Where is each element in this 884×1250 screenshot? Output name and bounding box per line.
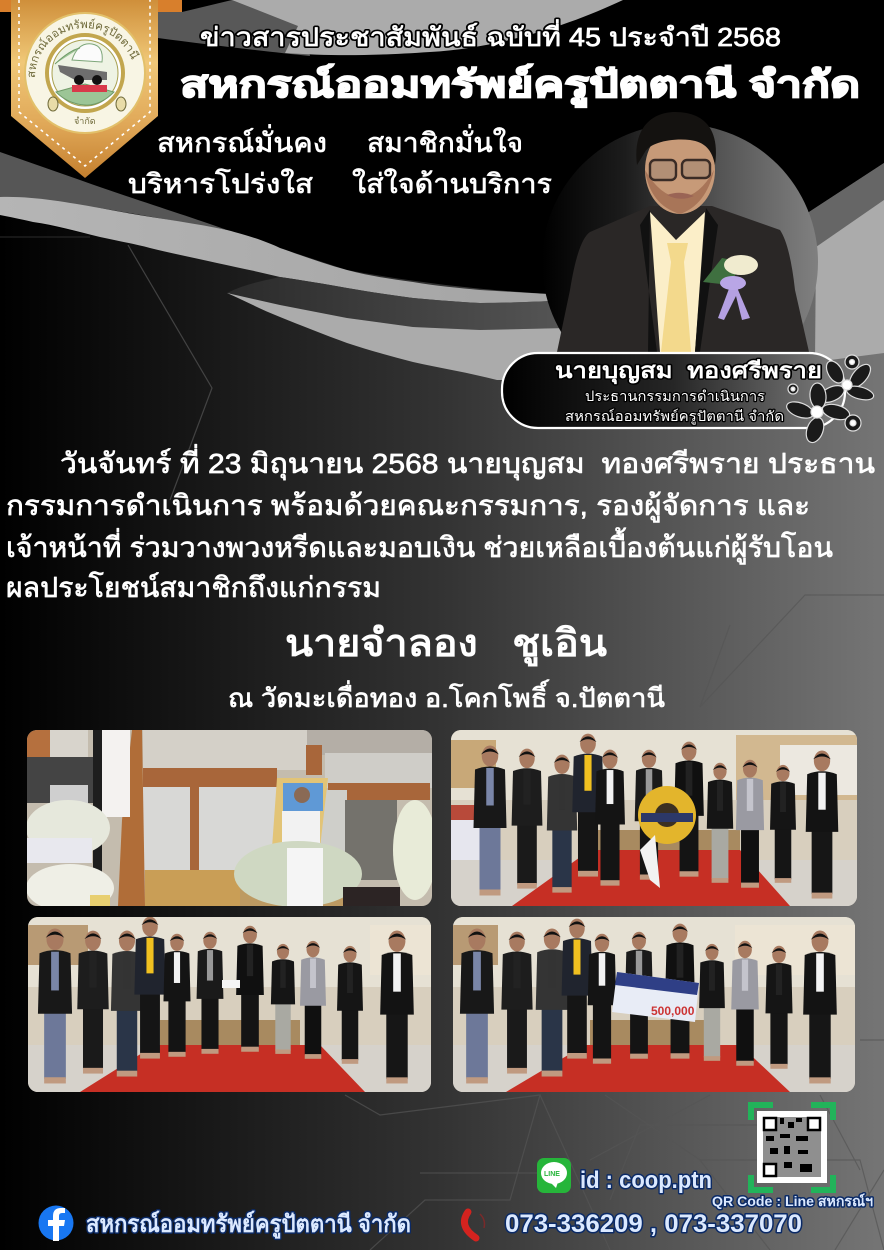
- name plate: นายบุญสม ทองศรีพราย: [555, 358, 822, 385]
- phone numbers: 073-336209 , 073-337070: [505, 1210, 802, 1238]
- logo seal: สหกรณ์ออมทรัพย์ครูปัตตานี: [28, 18, 140, 78]
- logo seal: [24, 12, 146, 134]
- body paragraph: กรรมการดำเนินการ พร้อมด้วยคณะกรรมการ, รองผู้จัดการ และ: [6, 490, 810, 523]
- photo: handing over envelope: [28, 917, 431, 1092]
- heading: newsletter issue: ข่าวสารประชาสัมพันธ์ ฉบับที่ 45 ประจำปี 2568: [200, 19, 781, 52]
- deceased member name: นายจำลอง ชูเอิน: [285, 623, 607, 667]
- photo: memorial portrait: [26, 730, 437, 912]
- icon: black flowers: [784, 355, 875, 445]
- body paragraph: วันจันทร์ ที่ 23 มิถุนายน 2568 นายบุญสม ทองศรีพราย ประธาน: [60, 444, 875, 481]
- photo: group with wreath: [451, 730, 857, 906]
- slogans: ใส่ใจด้านบริการ: [352, 168, 552, 199]
- slogans: สหกรณ์มั่นคง: [157, 124, 327, 158]
- slogans: สมาชิกมั่นใจ: [367, 124, 523, 158]
- location: ณ วัดมะเดื่อทอง อ.โคกโพธิ์ จ.ปัตตานี: [228, 679, 665, 713]
- portrait of chairman: [546, 112, 818, 352]
- QR caption: QR Code : Line สหกรณ์ฯ: [712, 1193, 873, 1209]
- body paragraph: ผลประโยชน์สมาชิกถึงแก่กรรม: [6, 571, 381, 603]
- heading: newsletter issue: ข่าวสารประชาสัมพันธ์ ฉบับที่ 45 ประจำปี 2568: [200, 19, 781, 52]
- name plate: [502, 353, 875, 445]
- LINE id: id : coop.ptn: [580, 1167, 712, 1194]
- corsage: [703, 255, 758, 320]
- icon: LINE: [537, 1158, 571, 1193]
- icon: phone: [464, 1212, 484, 1238]
- icon: LINE: LINE: [544, 1171, 560, 1178]
- photo: handing over cheque: [453, 917, 855, 1092]
- body paragraph: เจ้าหน้าที่ ร่วมวางพวงหรีดและมอบเงิน ช่วยเหลือเบื้องต้นแก่ผู้รับโอน: [6, 527, 833, 565]
- slogans: [128, 124, 552, 199]
- title: cooperative name: สหกรณ์ออมทรัพย์ครูปัตตานี จำกัด: [180, 64, 860, 108]
- ribbon badge with cooperative logo: [0, 0, 182, 178]
- Facebook page name: สหกรณ์ออมทรัพย์ครูปัตตานี จำกัด: [86, 1210, 411, 1239]
- body paragraph: [6, 444, 875, 603]
- name plate: สหกรณ์ออมทรัพย์ครูปัตตานี จำกัด: [565, 408, 784, 425]
- photo: handing over cheque: 500,000: [651, 1004, 695, 1018]
- slogans: บริหารโปร่งใส: [128, 168, 313, 199]
- logo seal: จำกัด: [74, 116, 96, 126]
- QR code: [751, 1105, 833, 1190]
- name plate: ประธานกรรมการดำเนินการ: [585, 388, 765, 404]
- icon: Facebook: [38, 1206, 74, 1241]
